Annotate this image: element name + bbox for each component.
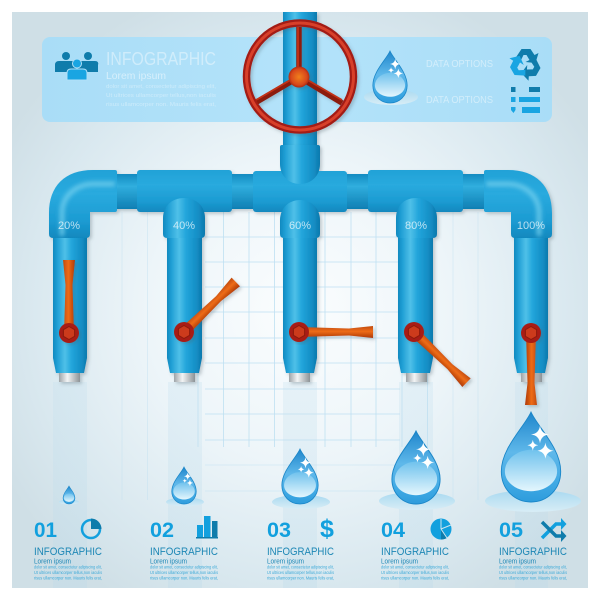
step subheading: Lorem ipsum: [381, 556, 418, 566]
step body: [499, 564, 568, 580]
step body: risus ullamcorper non. Mauris felis erat,: [499, 576, 567, 580]
water drop 1: [59, 486, 79, 504]
step body: risus ullamcorper non. Mauris felis erat,: [34, 576, 102, 580]
step body: dolor sit amet, consectetur adipiscing elit,: [34, 564, 102, 570]
icon: bar chart: [196, 516, 218, 538]
icon: pie chart: [430, 518, 452, 540]
step subheading: Lorem ipsum: [499, 556, 536, 566]
lever 3: [289, 322, 373, 342]
step heading: INFOGRAPHIC: [267, 546, 334, 558]
lever 1: [59, 260, 79, 343]
percent labels: [58, 220, 545, 232]
collar 4: [396, 198, 437, 238]
water drop 4: [379, 431, 455, 510]
collar 2: [163, 198, 205, 238]
step subheading: Lorem ipsum: [150, 556, 187, 566]
step 04: [381, 518, 452, 580]
main pipe section left: [137, 170, 232, 212]
step body: risus ullamcorper non. Mauris felis erat,: [150, 576, 218, 580]
drop pipe 3: [283, 236, 317, 382]
couplers: [115, 174, 485, 209]
icon: recycle: [506, 49, 543, 83]
spokes: [255, 27, 342, 103]
main valve wheel: [246, 23, 354, 130]
drop pipe 2: [167, 236, 202, 382]
percent labels: 20%: [58, 220, 80, 232]
data options label 1: DATA OPTIONS: [426, 58, 493, 70]
icon: pie ring: [82, 518, 102, 538]
step body: dolor sit amet, consectetur adipiscing elit,: [381, 564, 449, 570]
step body: dolor sit amet, consectetur adipiscing elit,: [150, 564, 218, 570]
step subheading: Lorem ipsum: [267, 556, 304, 566]
water drop 2: [166, 467, 204, 506]
number 02: 02: [150, 519, 174, 542]
data options label 2: DATA OPTIONS: [426, 94, 493, 106]
lever 5: [521, 323, 541, 405]
step heading: INFOGRAPHIC: [381, 546, 449, 558]
step body: Ut ultrices ullamcorper tellus,non iaculis: [499, 570, 568, 575]
header subtitle: Lorem ipsum: [106, 70, 166, 82]
icon: shuffle: [542, 518, 566, 542]
step body: risus ullamcorper non. Mauris felis erat,: [381, 576, 449, 580]
step body: Ut ultrices ullamcorper tellus,non iaculis: [267, 570, 335, 575]
center tee joint: [253, 171, 347, 212]
top collar: [280, 145, 320, 184]
left elbow: [49, 170, 117, 238]
step 05: [499, 518, 568, 580]
step 03: [267, 515, 335, 580]
background grid: [122, 212, 478, 500]
water drop 3: [272, 449, 330, 509]
step body: Ut ultrices ullamcorper tellus,non iaculis: [34, 570, 103, 575]
right elbow: [484, 170, 552, 238]
step body: [381, 564, 450, 580]
drop pipe 1: [53, 236, 87, 382]
drop pipe 4: [398, 236, 433, 382]
number 04: 04: [381, 519, 405, 542]
step heading: INFOGRAPHIC: [150, 546, 218, 558]
rim: [246, 23, 354, 130]
icon: header water drop: [364, 51, 418, 105]
header body text: Ut ultrices ullamcorper tellus,non iaculis: [106, 93, 217, 99]
lever 4: [404, 322, 471, 387]
step body: [150, 564, 219, 580]
number 03: 03: [267, 519, 291, 542]
step body: [267, 564, 335, 580]
step body: risus ullamcorper non. Mauris felis erat,: [267, 576, 334, 580]
step heading: INFOGRAPHIC: [499, 546, 567, 558]
step heading: INFOGRAPHIC: [34, 546, 102, 558]
step 02: [150, 516, 219, 580]
percent labels: 60%: [289, 220, 311, 232]
header body text: dolor sit amet, consectetur adipiscing elit,: [106, 84, 216, 90]
drop pipe 5: [514, 236, 548, 382]
water drop 5: [485, 412, 581, 512]
step body: [34, 564, 103, 580]
number 01: 01: [34, 519, 57, 542]
header body text: risus ullamcorper non. Mauris felis erat,: [106, 102, 216, 108]
percent labels: 80%: [405, 220, 427, 232]
icon: people: [55, 52, 98, 80]
header title: INFOGRAPHIC: [106, 49, 216, 69]
horizontal pipe assembly: [49, 145, 552, 382]
water light strips: [53, 382, 548, 588]
icon: dollar: $: [320, 515, 334, 543]
step body: dolor sit amet, consectetur adipiscing elit,: [499, 564, 567, 570]
step body: dolor sit amet, consectetur adipiscing elit,: [267, 564, 334, 570]
vertical supply pipe: [283, 12, 317, 152]
header panel: [42, 37, 552, 122]
step 01: [34, 518, 103, 580]
step body: Ut ultrices ullamcorper tellus,non iaculis: [381, 570, 450, 575]
icon: list: [511, 87, 540, 113]
lever 2: [174, 278, 240, 342]
percent labels: 100%: [517, 220, 545, 232]
step body: Ut ultrices ullamcorper tellus,non iaculis: [150, 570, 219, 575]
main pipe section right: [368, 170, 463, 212]
number 05: 05: [499, 519, 523, 542]
collar 3: [280, 200, 320, 238]
step subheading: Lorem ipsum: [34, 556, 71, 566]
percent labels: 40%: [173, 220, 195, 232]
header body text: [106, 84, 217, 108]
hub: [288, 66, 310, 88]
